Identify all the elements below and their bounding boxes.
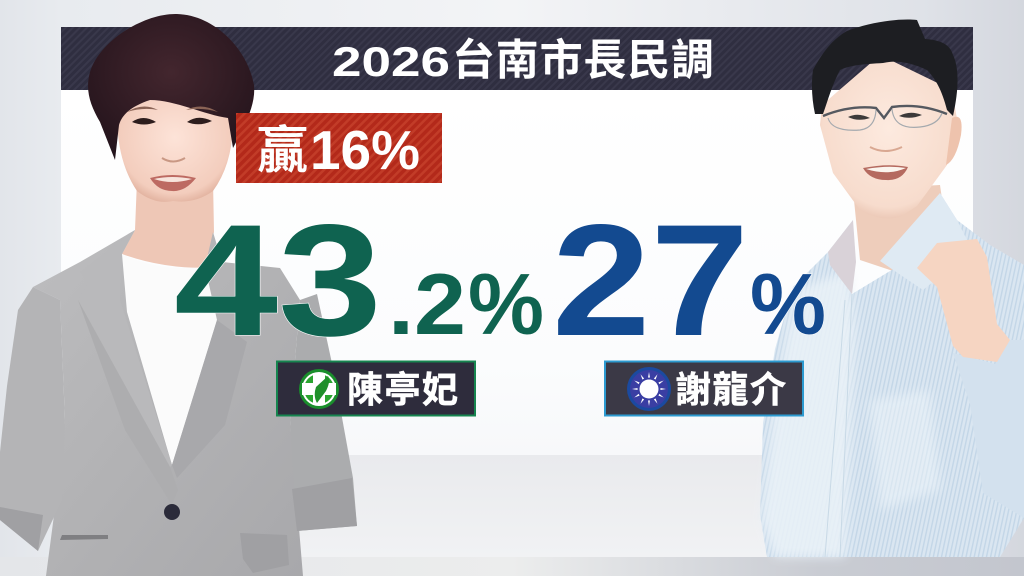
name text: 謝龍介: [675, 369, 786, 410]
jacket right sleeve: [290, 294, 357, 531]
jacket button: [164, 504, 180, 520]
lead badge text: [257, 119, 420, 181]
eyes: [848, 113, 922, 120]
ear: [946, 117, 962, 165]
face: [820, 55, 958, 218]
name label: 謝龍介: [605, 362, 803, 416]
photo: 謝龍介 candidate: [760, 19, 1024, 557]
jacket sleeve cuffs: [0, 478, 357, 551]
mouth: [863, 165, 908, 180]
icon: green party emblem: [299, 369, 339, 409]
blue percentage: %: [750, 257, 826, 353]
green percentage: %: [468, 257, 544, 353]
nose: [162, 158, 185, 162]
face: [117, 85, 233, 202]
blue percentage: 27: [552, 191, 749, 369]
icon: blue party emblem: [627, 367, 671, 411]
shirt: [760, 193, 1024, 557]
jacket lapels: [78, 230, 172, 467]
white top: [122, 254, 217, 465]
glasses: [823, 106, 947, 118]
fist and forearm: [917, 239, 1010, 362]
name text: 陳亭妃: [347, 369, 458, 410]
lead badge text: 贏: [257, 122, 308, 179]
eyebrows: [127, 106, 218, 112]
nose: [870, 147, 902, 151]
white content panel: [61, 90, 973, 557]
title: 台南市長民調: [452, 37, 714, 85]
title banner: [61, 27, 973, 90]
arm sleeve: [953, 340, 1024, 518]
name label: 陳亭妃: [277, 362, 475, 416]
neck: [122, 180, 214, 268]
shirt collar: [880, 193, 972, 290]
jacket pockets: [60, 535, 108, 540]
jacket left sleeve: [0, 287, 65, 551]
shirt placket: [825, 294, 852, 557]
mouth: [150, 175, 196, 191]
lead badge text: 16%: [310, 119, 420, 181]
title: [332, 37, 714, 85]
eyes: [132, 118, 212, 124]
hair: [812, 19, 958, 116]
hair: [88, 14, 254, 160]
green percentage: .2: [388, 257, 466, 353]
jacket body: [33, 230, 303, 576]
green percentage: 43: [174, 191, 382, 369]
neck: [853, 185, 945, 275]
lead badge: [236, 113, 442, 183]
title: 2026: [332, 38, 450, 85]
photo: 陳亭妃 candidate: [0, 14, 357, 576]
green percentage: [174, 191, 544, 369]
shirt highlight: [762, 270, 855, 557]
blue percentage: [552, 191, 826, 369]
